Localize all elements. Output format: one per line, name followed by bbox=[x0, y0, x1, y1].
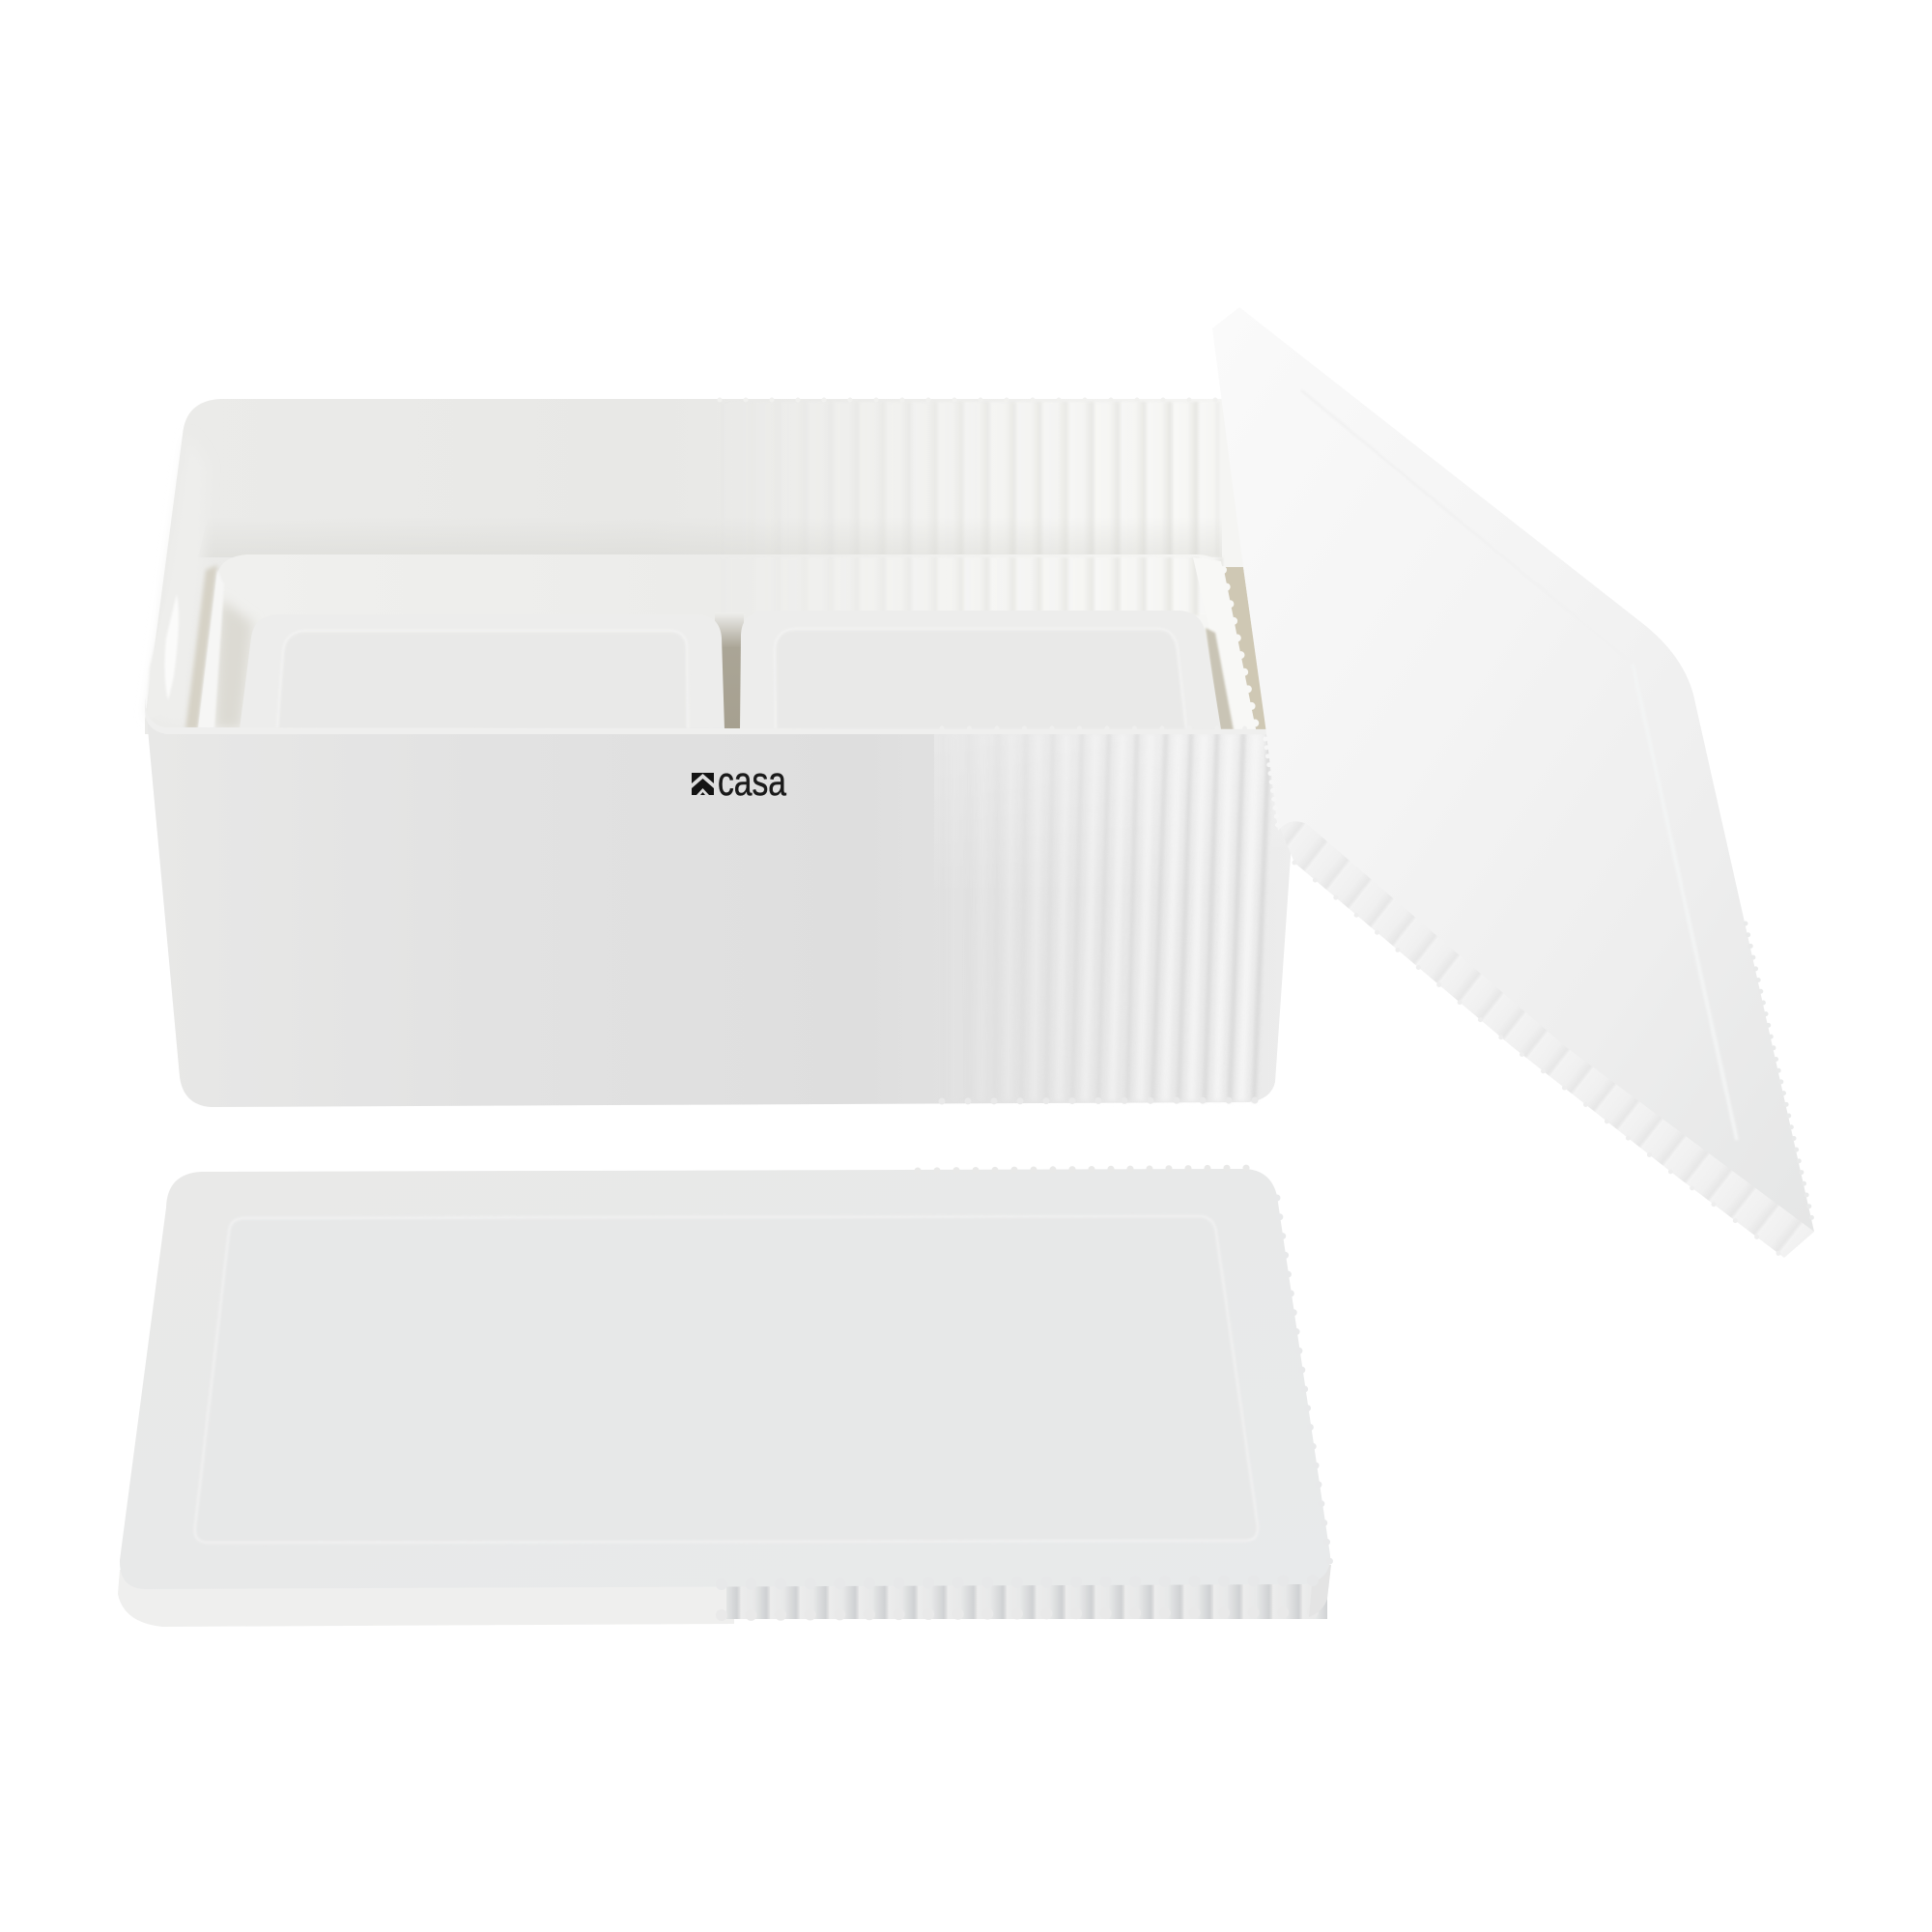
logo icon bbox=[692, 773, 714, 795]
logo wordmark: casa bbox=[718, 758, 787, 804]
inner tray bbox=[198, 554, 1256, 729]
back wall bottom shading bbox=[198, 517, 1222, 557]
back rim scallops bbox=[720, 398, 1219, 402]
open lid rib strip bbox=[1275, 816, 1814, 1258]
gap between small boxes bbox=[715, 612, 744, 730]
lid ribbed edge bbox=[722, 1565, 1331, 1619]
left small box bbox=[240, 614, 724, 729]
casa logo bbox=[692, 758, 787, 804]
open lid bbox=[1212, 307, 1814, 1258]
front rim bbox=[145, 697, 1299, 734]
lid top surface bbox=[120, 1169, 1330, 1589]
front rim scallops bbox=[942, 726, 1256, 730]
left handle bbox=[147, 560, 188, 720]
tray floor shadow left bbox=[214, 599, 253, 729]
product illustration bbox=[118, 388, 1814, 1627]
tray serrated edge bbox=[1223, 570, 1256, 726]
open lid right serration bbox=[1746, 923, 1814, 1229]
open lid left serration bbox=[1265, 739, 1278, 829]
tray left bevel bbox=[198, 570, 224, 729]
front ribs bbox=[1080, 734, 1271, 1099]
shadow beside right small box bbox=[1206, 628, 1234, 730]
lid raised inner rectangle bbox=[195, 1216, 1258, 1543]
tray right wall bbox=[1193, 557, 1256, 729]
front panel bbox=[145, 697, 1299, 1107]
back wall ribs bbox=[1090, 402, 1198, 554]
bottom scallops bbox=[942, 1100, 1256, 1101]
ribbed area sheen bbox=[934, 734, 1292, 1101]
open lid face bbox=[1212, 307, 1814, 1232]
beige band left of tray bbox=[185, 565, 217, 729]
right small box bbox=[740, 611, 1221, 729]
open lid inner line bbox=[1301, 390, 1737, 1140]
lid side edge bbox=[118, 1570, 734, 1627]
left interior wall bbox=[147, 435, 207, 727]
beige shadow behind tray right edge bbox=[1208, 567, 1266, 730]
lid scalloped edges bbox=[722, 1168, 1330, 1584]
storage box bbox=[145, 399, 1299, 1107]
back wall bbox=[145, 399, 1275, 734]
lower flat lid bbox=[118, 1168, 1331, 1627]
